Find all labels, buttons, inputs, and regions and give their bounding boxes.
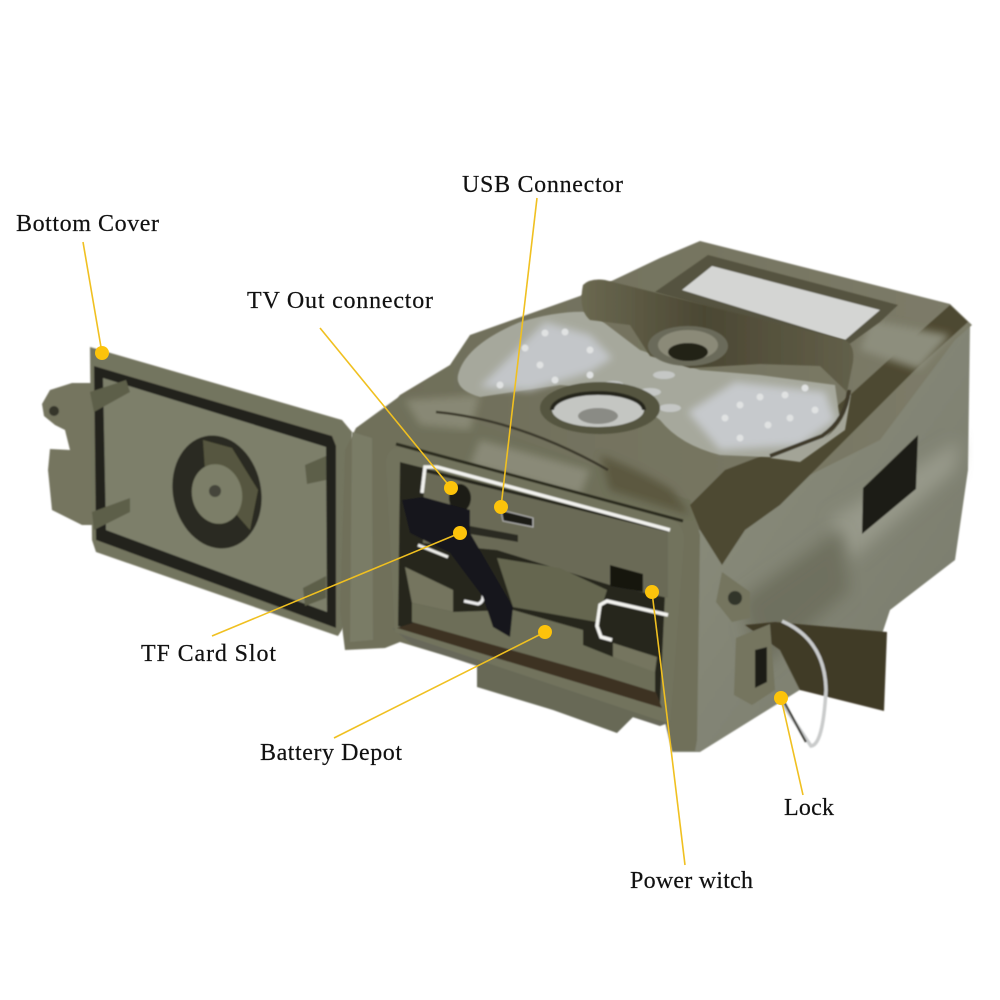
door opening frame [386, 448, 684, 724]
solar screen [655, 255, 898, 345]
camera door: bottom cover [42, 347, 352, 636]
label: USB Connector: USB Connector [462, 172, 623, 198]
hinge barrel shading [350, 432, 373, 642]
power switch [610, 565, 643, 592]
opening interior [398, 462, 668, 704]
TF card slot [470, 526, 518, 542]
door clips [90, 380, 326, 606]
groove above opening [436, 412, 608, 470]
battery wire clips [597, 601, 668, 640]
steel ring [780, 621, 826, 746]
battery holder [412, 603, 655, 692]
interior board [423, 472, 668, 598]
lock [734, 621, 887, 746]
TV jack [449, 484, 471, 512]
label: TF Card Slot: TF Card Slot [141, 641, 276, 667]
hasp strap [745, 622, 887, 711]
USB port [501, 510, 533, 527]
label: TV Out connector: TV Out connector [247, 288, 433, 314]
white metal contact [422, 467, 670, 530]
velcro strap [402, 497, 513, 637]
lens plate and IR panels [458, 312, 851, 462]
label: Battery Depot: Battery Depot [260, 740, 402, 766]
dark seal above opening [396, 444, 683, 521]
window on right side [862, 435, 918, 534]
camo patches [690, 305, 968, 565]
door hinge tab [42, 383, 96, 525]
rim arc [770, 395, 851, 462]
shelf below holder [397, 622, 662, 708]
visor and camera lens [582, 280, 853, 392]
label: Lock: Lock [784, 795, 834, 821]
mount holes tab [716, 572, 750, 622]
left IR LEDs [480, 322, 612, 390]
PIR sensor ring [540, 382, 660, 434]
label: Bottom Cover: Bottom Cover [16, 211, 159, 237]
right side face [668, 320, 970, 752]
bottom lip [392, 628, 671, 726]
right IR LEDs [688, 382, 835, 450]
label: Power witch: Power witch [630, 868, 753, 894]
leader lines [83, 198, 803, 865]
top face [370, 241, 972, 530]
bottom tab [477, 660, 663, 733]
battery lid [497, 558, 607, 622]
main panel [458, 312, 840, 458]
camera body [340, 241, 972, 752]
dark wire [784, 702, 806, 742]
hinge block and front frame [340, 396, 700, 751]
leader dots [95, 346, 788, 705]
holder blocks [405, 567, 657, 672]
door round recess [162, 427, 272, 557]
